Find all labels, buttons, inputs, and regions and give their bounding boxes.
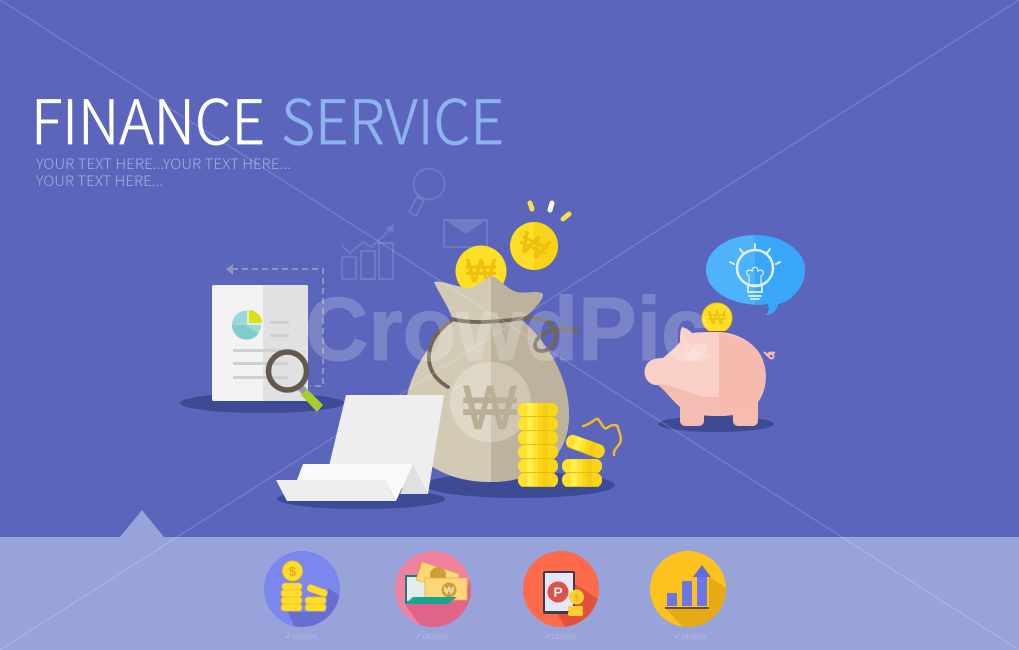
document with pie chart	[180, 264, 344, 413]
icon: banknotes badge: ₩	[444, 585, 455, 597]
receipt shadow	[277, 489, 445, 509]
pig shaded half	[719, 333, 766, 416]
title: FINANCE	[31, 73, 265, 162]
pig shadow	[658, 416, 774, 432]
gold coin stacks	[518, 403, 621, 487]
pig ear highlight	[681, 327, 712, 361]
icon: light bulb	[730, 244, 780, 299]
icon: faint envelope	[444, 220, 487, 247]
falling coins	[456, 203, 569, 296]
front fold	[276, 480, 396, 501]
badge captions: ✓DESIGN	[415, 631, 448, 641]
won medallion: ₩	[463, 374, 517, 443]
badge captions	[285, 631, 707, 641]
speech bubble with light bulb	[706, 235, 805, 315]
icon: faint growth chart	[341, 224, 394, 279]
icon: rising bar chart badge	[650, 551, 726, 627]
footer band	[0, 510, 1019, 650]
subtitle text: YOUR TEXT HERE...YOUR TEXT HERE...	[36, 154, 291, 174]
icon: tablet points badge	[523, 551, 599, 627]
icon: banknotes badge	[395, 551, 471, 627]
bubble shaded half	[755, 235, 805, 315]
title: SERVICE	[281, 73, 504, 162]
subtitle text: YOUR TEXT HERE...	[36, 171, 163, 191]
money bag	[405, 276, 615, 498]
pig legs	[680, 395, 758, 426]
bag body	[405, 276, 569, 482]
magnifier	[268, 352, 323, 412]
pig tail	[764, 352, 775, 358]
fold shade	[400, 464, 428, 494]
pig belly	[658, 384, 719, 416]
faint background icons	[341, 168, 487, 279]
paper sheet	[212, 285, 308, 401]
title	[31, 73, 504, 162]
icon: coin stacks badge	[264, 551, 340, 627]
tall stack	[518, 403, 558, 487]
icon: tablet points badge: P	[553, 584, 563, 600]
icon: faint magnifier	[409, 168, 444, 216]
text lines	[233, 321, 289, 379]
middle fold	[297, 464, 413, 501]
sparkle rays	[530, 203, 569, 219]
back sheet	[328, 395, 444, 494]
icon: coin stacks badge: $	[289, 564, 297, 579]
short stack	[562, 433, 607, 487]
bag shaded half	[491, 276, 569, 482]
document shadow	[180, 393, 344, 413]
won medallion	[450, 362, 531, 443]
pie chart	[232, 309, 263, 340]
bag rope	[429, 318, 578, 387]
watermark: CrowdPic	[305, 280, 710, 380]
gold squiggle	[583, 419, 621, 455]
badge captions: ✓DESIGN	[674, 631, 707, 641]
badge captions: ✓DESIGN	[544, 631, 577, 641]
folded paper receipt	[276, 395, 445, 509]
dashed arrow	[226, 264, 323, 386]
coin behind bag: ₩	[466, 253, 496, 289]
pig body	[644, 327, 766, 416]
tilted coin: ₩	[514, 226, 554, 268]
bubble	[706, 235, 805, 315]
coin in slot: ₩	[708, 308, 726, 329]
subtitle text	[36, 154, 291, 191]
icon: tablet points badge: $	[574, 593, 579, 603]
badge captions: ✓DESIGN	[285, 631, 318, 641]
bag shadow	[425, 472, 615, 498]
piggy bank	[644, 303, 775, 432]
